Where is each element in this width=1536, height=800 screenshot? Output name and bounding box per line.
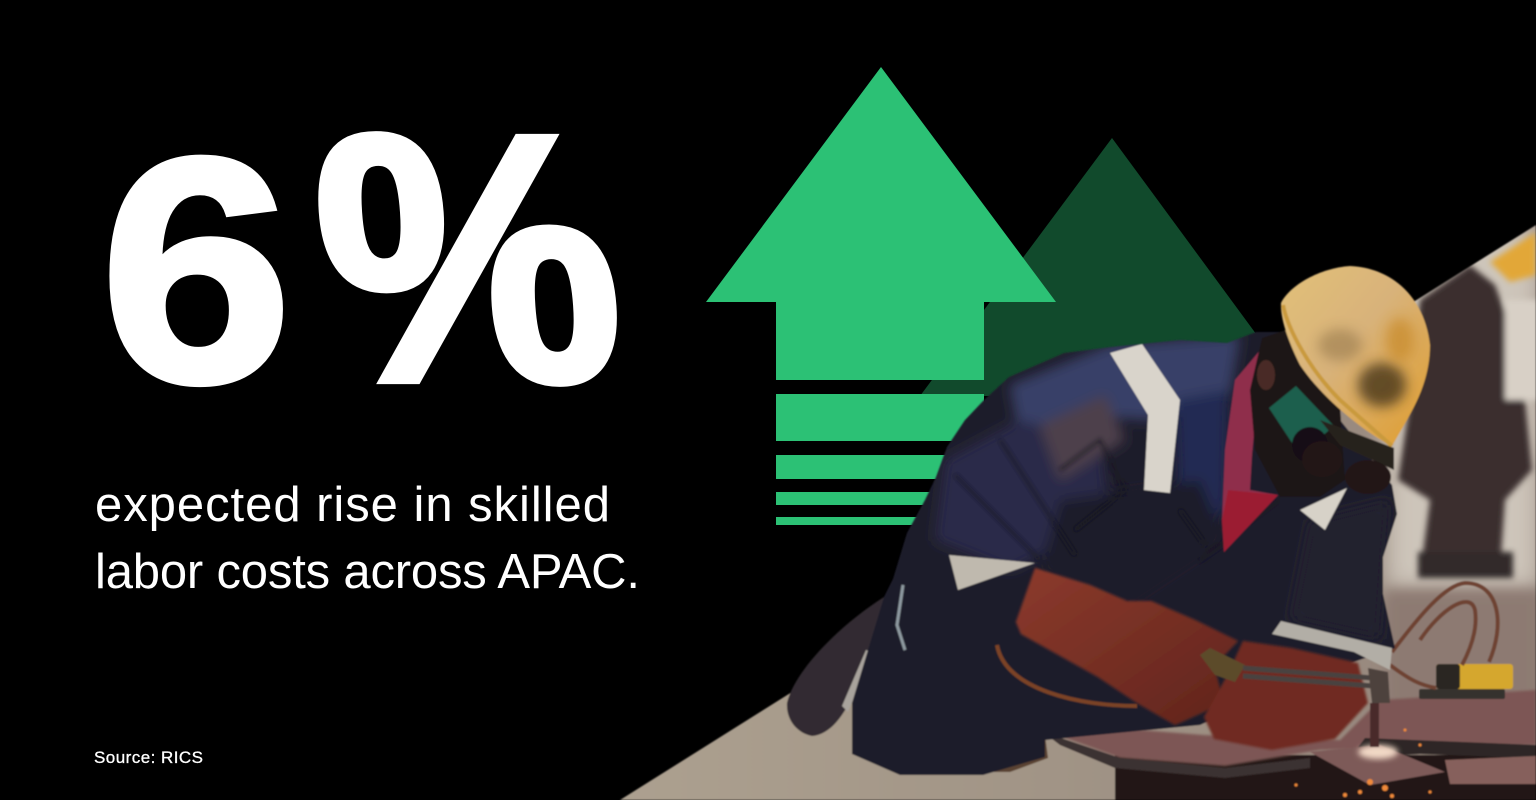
photo background: blurred worksite [620, 225, 1536, 800]
welder knee patch [990, 735, 1048, 772]
face [1250, 330, 1345, 497]
tape measure on tray [1419, 664, 1513, 699]
welding goggles [1269, 386, 1394, 494]
description text: expected rise in skilled [95, 478, 610, 532]
second glove [1204, 641, 1368, 750]
blurred worker in the background [1398, 232, 1536, 578]
dark green background arrow [920, 138, 1262, 396]
welder coverall body [852, 332, 1397, 775]
big statistic: % [304, 62, 632, 455]
collar patch [1300, 488, 1347, 530]
big statistic: 6 [100, 92, 292, 449]
green up arrow with stripes [706, 67, 1056, 525]
source: Source: RICS [94, 748, 203, 767]
reflective shoulder stripe [1110, 344, 1180, 493]
welding gauntlet [1016, 568, 1238, 725]
cutting torch [1200, 648, 1390, 747]
welder boot [787, 597, 886, 736]
gas hoses [1390, 583, 1498, 688]
work plates and sparks [1043, 583, 1536, 800]
hose left [997, 645, 1137, 706]
sleeve cuff [1272, 621, 1392, 670]
maroon shirt [1222, 348, 1278, 552]
hard hat [1281, 266, 1430, 446]
photo: welder at work [620, 225, 1536, 800]
big statistic [100, 62, 632, 455]
description text: labor costs across APAC. [95, 545, 640, 599]
reflective arm stripe [949, 555, 1035, 590]
jacket shading [932, 338, 1330, 571]
safety chain [897, 585, 905, 650]
description text [95, 478, 640, 599]
